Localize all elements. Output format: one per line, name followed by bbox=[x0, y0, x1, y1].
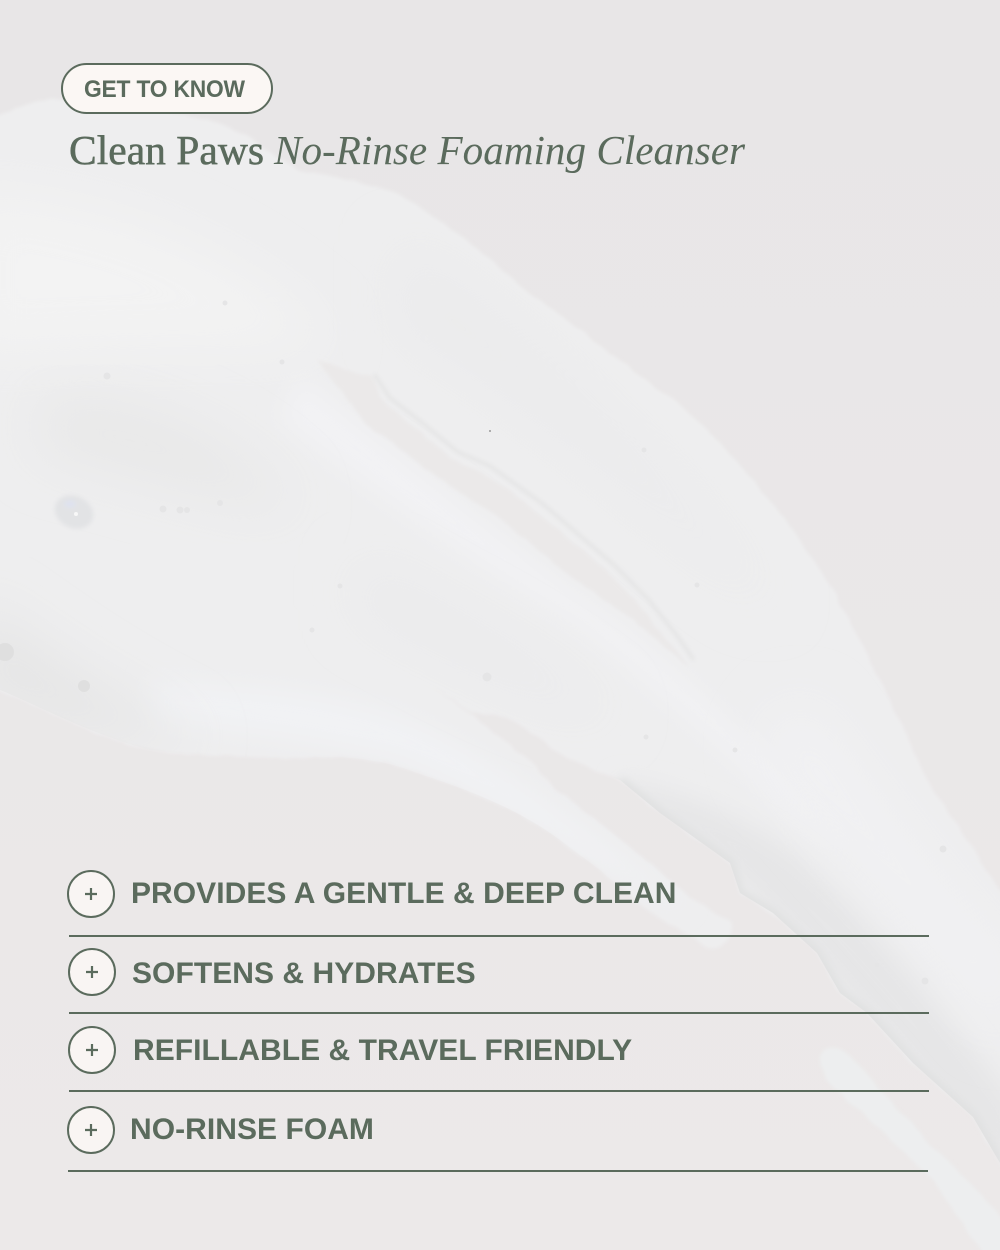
feature text: NO-RINSE FOAM bbox=[130, 1113, 374, 1146]
badge: get to know bbox=[61, 63, 273, 114]
icon: plus circle bbox=[67, 1106, 115, 1154]
badge: get to know: GET TO KNOW bbox=[84, 76, 245, 103]
feature row: gentle clean bbox=[67, 870, 929, 937]
foam shading bbox=[67, 780, 1000, 1162]
divider bbox=[69, 935, 929, 937]
gap between foam streams bbox=[317, 360, 690, 668]
title bbox=[69, 127, 746, 173]
feature row: no-rinse foam bbox=[67, 1106, 928, 1172]
title: Clean Paws bbox=[69, 127, 264, 173]
feature text: PROVIDES A GENTLE & DEEP CLEAN bbox=[131, 877, 676, 910]
foam swipe background bbox=[0, 177, 1000, 1022]
feature row: refillable bbox=[68, 1026, 929, 1092]
small foam streak bbox=[820, 1047, 1000, 1250]
gap shadow along upper stream bbox=[374, 374, 694, 660]
icon: plus circle bbox=[67, 870, 115, 918]
divider bbox=[69, 1090, 929, 1092]
feature row: softens bbox=[68, 948, 929, 1014]
icon: plus circle bbox=[68, 1026, 116, 1074]
feature text: REFILLABLE & TRAVEL FRIENDLY bbox=[133, 1034, 632, 1067]
feature list bbox=[67, 870, 929, 1172]
scalloped edge shadow bbox=[624, 782, 840, 992]
bubbles bbox=[0, 300, 946, 984]
feature text: SOFTENS & HYDRATES bbox=[132, 957, 476, 990]
icon: plus circle bbox=[68, 948, 116, 996]
title: No-Rinse Foaming Cleanser bbox=[273, 127, 746, 173]
divider bbox=[69, 1012, 929, 1014]
divider bbox=[68, 1170, 928, 1172]
